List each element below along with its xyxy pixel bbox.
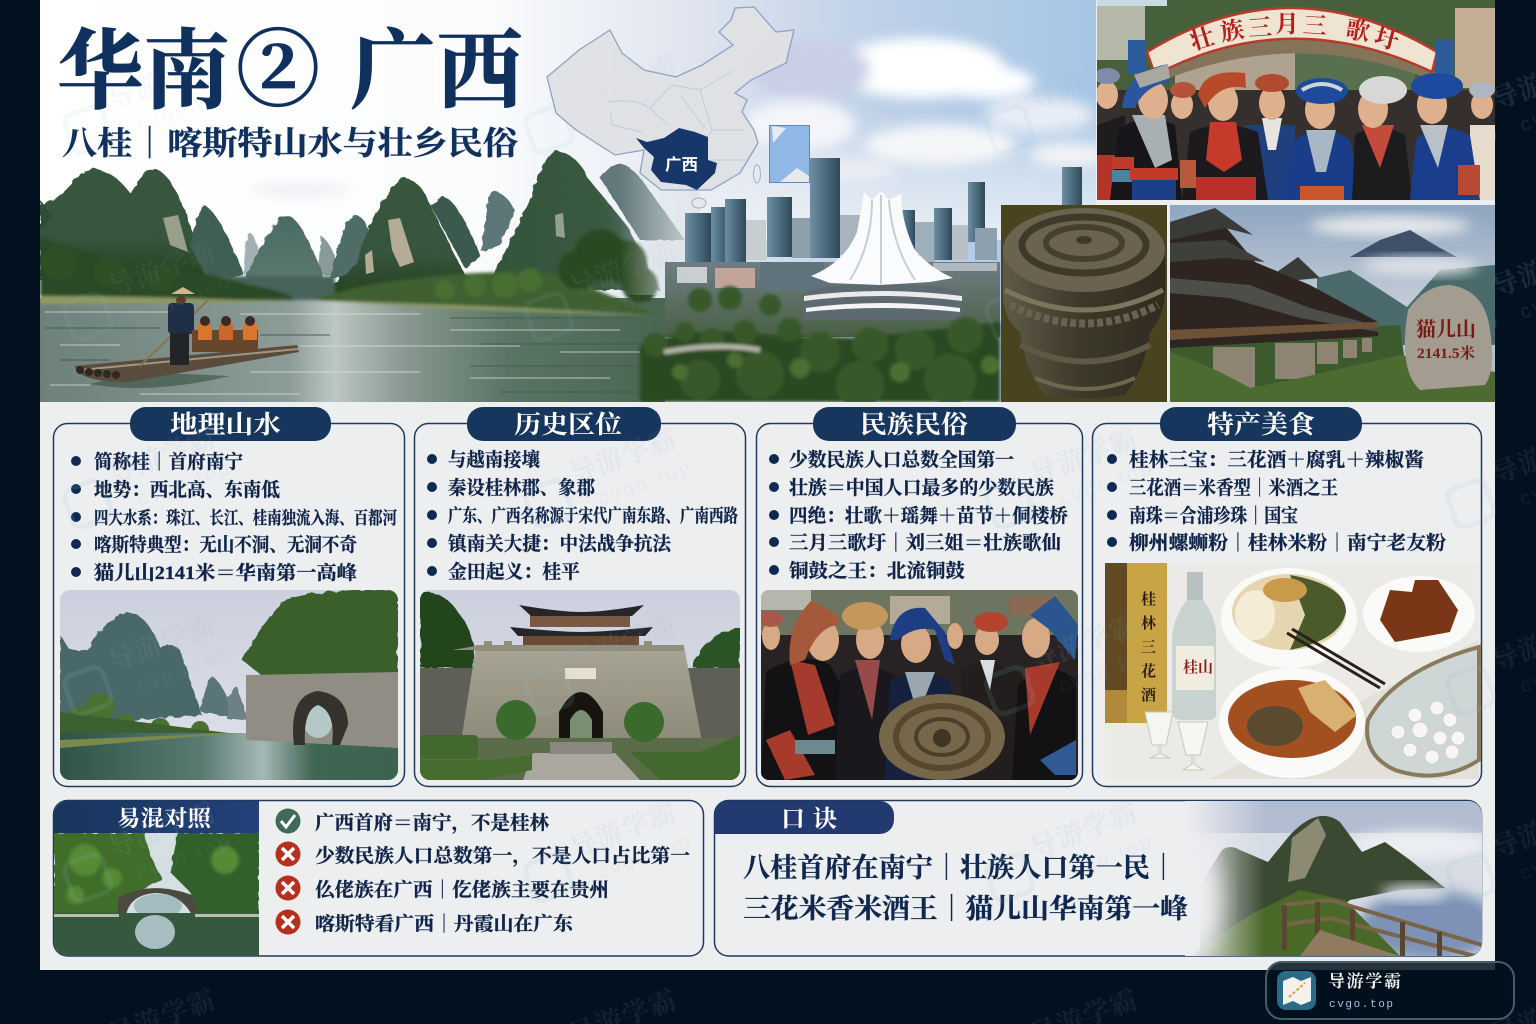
Guangxi: 广西 bbox=[665, 156, 698, 174]
festival arch lettering: 族 bbox=[1218, 16, 1246, 47]
brand url: cvgo.top bbox=[1329, 999, 1393, 1011]
heading tab bbox=[714, 801, 894, 834]
brand icon bbox=[1277, 971, 1316, 1010]
bullet list: 镇南关大捷：中法战争抗法 bbox=[448, 532, 673, 555]
heading pill: 民族民俗 bbox=[860, 411, 969, 439]
bullet list: 金田起义：桂平 bbox=[448, 560, 580, 583]
watermark layer over hero bbox=[40, 0, 1096, 402]
bullet list: 四绝：壮歌＋瑶舞＋苗节＋侗楼桥 bbox=[789, 504, 1068, 527]
bullet list bbox=[769, 449, 1068, 582]
bullet list: 壮族＝中国人口最多的少数民族 bbox=[789, 477, 1054, 499]
title: 广西 bbox=[350, 23, 523, 120]
statement four: 喀斯特看广西｜丹霞山在广东 bbox=[315, 913, 574, 935]
clouds bbox=[250, 38, 1110, 195]
pearl shell bbox=[1367, 647, 1479, 776]
river snail noodles bbox=[1219, 668, 1365, 778]
heading pill bbox=[813, 407, 1016, 441]
bullet list: 与越南接壤 bbox=[448, 448, 540, 471]
Taiwan bbox=[754, 165, 760, 183]
Hainan bbox=[692, 198, 706, 208]
Sanhua liquor box: 花 bbox=[1141, 662, 1156, 680]
cups bbox=[1145, 712, 1208, 770]
province lines bbox=[608, 70, 745, 160]
watermark layer bbox=[0, 402, 1536, 1024]
bullet list: 三月三歌圩｜刘三姐＝壮族歌仙 bbox=[789, 531, 1061, 554]
liquor bottle: 桂山 bbox=[1183, 658, 1213, 676]
crowd bbox=[1094, 64, 1495, 200]
bullet list: 铜鼓之王：北流铜鼓 bbox=[789, 560, 965, 582]
title: ② bbox=[236, 25, 320, 118]
photo: wind-rain bridge and Mao'er mountain stone bbox=[1170, 205, 1495, 402]
city haze bbox=[620, 165, 700, 295]
panel: ethnic customs bbox=[756, 407, 1082, 786]
bamboo raft with boatman bbox=[75, 287, 299, 388]
brand name: 导游学霸 bbox=[1328, 972, 1401, 991]
bullet list: 桂林三宝：三花酒＋腐乳＋辣椒酱 bbox=[1129, 449, 1424, 471]
heading pill: 地理山水 bbox=[170, 411, 281, 439]
watermark margins bbox=[1495, 0, 1536, 402]
festival arch lettering: 圩 bbox=[1372, 23, 1402, 56]
statement three: 仫佬族在广西｜仡佬族主要在贵州 bbox=[315, 879, 609, 901]
correct statement: 广西首府＝南宁，不是桂林 bbox=[315, 811, 549, 834]
panel: easily confused bbox=[54, 800, 704, 956]
bullet list: 喀斯特典型：无山不洞、无洞不奇 bbox=[94, 534, 357, 556]
heading pill: 特产美食 bbox=[1207, 411, 1315, 439]
bullet list: 猫儿山2141米＝华南第一高峰 bbox=[94, 561, 357, 584]
mnemonic line one: 八桂首府在南宁｜壮族人口第一民｜ bbox=[743, 853, 1177, 883]
mnemonic line two: 三花米香米酒王｜猫儿山华南第一峰 bbox=[743, 894, 1188, 924]
map of China bbox=[547, 7, 810, 208]
Guangxi bbox=[636, 128, 717, 190]
South China Sea inset bbox=[770, 126, 810, 182]
subtitle: 八桂｜喀斯特山水与壮乡民俗 bbox=[62, 125, 519, 161]
food still life bbox=[1105, 563, 1479, 779]
skyline bbox=[665, 158, 1082, 337]
liquor bottle bbox=[1172, 572, 1216, 720]
festival arch lettering: 壮 bbox=[1187, 23, 1218, 56]
river bbox=[40, 298, 665, 402]
green bank behind piers bbox=[1170, 325, 1404, 387]
panel: mnemonic bbox=[714, 800, 1500, 960]
festival arch lettering: 歌 bbox=[1344, 16, 1372, 47]
festival arch lettering: 三 bbox=[1247, 15, 1273, 43]
karst mountains bbox=[40, 150, 685, 298]
stone inscription: 猫儿山 bbox=[1416, 318, 1476, 341]
heading pill bbox=[467, 407, 661, 441]
Sanhua liquor box bbox=[1105, 563, 1167, 723]
photo: Zhennan Pass bbox=[420, 590, 740, 780]
heading pill: 历史区位 bbox=[514, 411, 622, 439]
Nanning convention centre bbox=[804, 191, 962, 320]
photo: bronze drum bbox=[1001, 205, 1167, 402]
panel: specialties bbox=[1092, 407, 1482, 786]
rice noodles bbox=[1221, 568, 1357, 668]
check icon bbox=[276, 808, 300, 834]
fermented bean curd bbox=[1363, 576, 1475, 652]
photo: Sanyuesan festival bbox=[1094, 0, 1495, 200]
bullet list: 地势：西北高、东南低 bbox=[94, 478, 280, 501]
heading pill bbox=[1160, 407, 1362, 441]
cross icon bbox=[276, 876, 300, 900]
China outline bbox=[547, 7, 794, 190]
brand badge bbox=[1266, 962, 1514, 1019]
panel: history bbox=[414, 407, 746, 786]
photo: stone arch bridge bbox=[54, 833, 259, 956]
festival arch lettering: 三 bbox=[1302, 13, 1328, 41]
heading tab: 易混对照 bbox=[117, 806, 213, 831]
bullet list: 南珠＝合浦珍珠｜国宝 bbox=[1129, 504, 1298, 527]
statement two: 少数民族人口总数第一，不是人口占比第一 bbox=[315, 845, 690, 867]
city trees bbox=[640, 286, 1000, 409]
heading pill bbox=[130, 407, 331, 441]
riverbank trees bbox=[40, 229, 658, 316]
bullet list bbox=[1107, 449, 1446, 554]
bullet list: 少数民族人口总数全国第一 bbox=[789, 449, 1014, 471]
cross icon bbox=[276, 842, 300, 866]
bullet list: 广东、广西名称源于宋代广南东路、广南西路 bbox=[448, 505, 738, 526]
bullet list: 柳州螺蛳粉｜桂林米粉｜南宁老友粉 bbox=[1129, 531, 1446, 554]
stone inscription: 2141.5米 bbox=[1417, 344, 1475, 362]
chopsticks bbox=[1287, 629, 1385, 688]
Sanhua liquor box: 林 bbox=[1141, 614, 1156, 632]
Sanhua liquor box: 三 bbox=[1141, 639, 1156, 656]
photo: Zhuang women with bronze drum bbox=[759, 590, 1078, 780]
Sanhua liquor box: 桂 bbox=[1141, 590, 1156, 608]
title: 华南 bbox=[57, 23, 230, 120]
bullet list: 三花酒＝米香型｜米酒之王 bbox=[1129, 477, 1338, 499]
heading tab: 口 诀 bbox=[781, 806, 837, 833]
festival arch lettering: 月 bbox=[1275, 11, 1299, 38]
festival arch lettering bbox=[1189, 12, 1400, 51]
mountain photo bbox=[1185, 801, 1482, 956]
stone inscription bbox=[1416, 318, 1476, 362]
Sanhua liquor box: 酒 bbox=[1141, 687, 1156, 704]
bullet list bbox=[71, 450, 397, 584]
panel: geography bbox=[54, 407, 404, 786]
bullet list: 四大水系：珠江、长江、桂南独流入海、百都河 bbox=[94, 508, 397, 528]
photo: Elephant Trunk Hill bbox=[60, 590, 398, 780]
bridge structure bbox=[1170, 220, 1378, 348]
hero scenery panel bbox=[40, 0, 1110, 409]
cross icon bbox=[276, 910, 300, 934]
bullet list: 秦设桂林郡、象郡 bbox=[448, 477, 595, 499]
bullet list bbox=[427, 448, 738, 583]
heading tab bbox=[54, 801, 259, 833]
bullet list: 简称桂｜首府南宁 bbox=[94, 450, 243, 473]
title bbox=[57, 23, 523, 120]
